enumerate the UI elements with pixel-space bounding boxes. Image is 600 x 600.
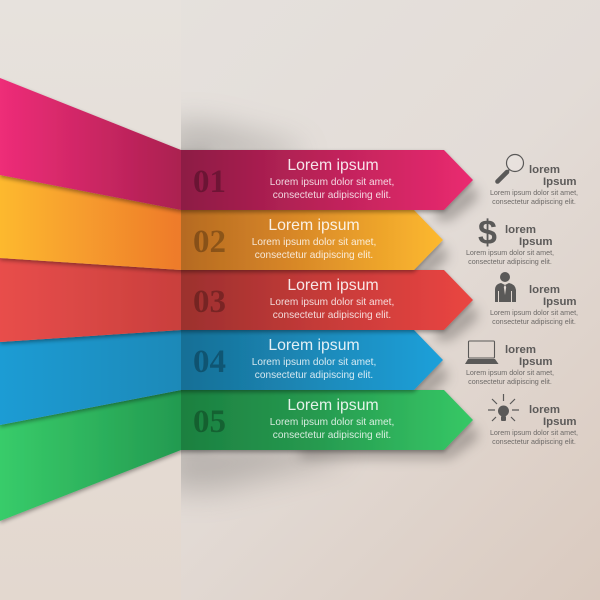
- side text 4: Lorem ipsum dolor sit amet,: [466, 369, 554, 377]
- band 1: pink: [0, 78, 473, 210]
- number 04: 04: [193, 344, 226, 380]
- band 4: blue: [0, 330, 443, 425]
- side text 4: consectetur adipiscing elit.: [468, 378, 552, 386]
- icon: dollar: $: [478, 214, 497, 252]
- arrow text 2: consectetur adipiscing elit.: [255, 250, 373, 261]
- band 2: orange: [0, 175, 443, 270]
- arrow text 4: Lorem ipsum: [268, 337, 360, 354]
- arrow: pink: [181, 150, 473, 210]
- number 02: 02: [193, 224, 226, 260]
- side text 3: Ipsum: [543, 296, 577, 308]
- icon: magnifier: [498, 154, 524, 182]
- left panel: blue: [0, 330, 181, 425]
- arrow text 2: [252, 217, 376, 261]
- left wall: [0, 0, 181, 600]
- arrow text 4: Lorem ipsum dolor sit amet,: [252, 357, 376, 368]
- side text 2: lorem: [505, 224, 536, 236]
- side text 3: lorem: [529, 284, 560, 296]
- arrow text 2: Lorem ipsum: [268, 217, 360, 234]
- side text 1: consectetur adipiscing elit.: [492, 198, 576, 206]
- icon: light bulb: [488, 394, 519, 421]
- arrow text 3: consectetur adipiscing elit.: [273, 310, 391, 321]
- left panel: red: [0, 258, 181, 342]
- band 5: green: [0, 390, 473, 521]
- side text 2: Ipsum: [519, 236, 553, 248]
- arrow: orange: [181, 210, 443, 270]
- arrow text 1: [270, 157, 394, 201]
- side text 5: lorem: [529, 404, 560, 416]
- side text 1: [490, 164, 578, 206]
- arrow text 1: Lorem ipsum dolor sit amet,: [270, 177, 394, 188]
- left panel: pink: [0, 78, 181, 210]
- side text 2: [466, 224, 554, 266]
- icon: businessman: [495, 272, 516, 302]
- side text 1: Lorem ipsum dolor sit amet,: [490, 189, 578, 197]
- arrow: green: [181, 390, 473, 450]
- side text 4: [466, 344, 554, 386]
- wall shadow: [165, 125, 340, 490]
- arrow: red: [181, 270, 473, 330]
- number 01: 01: [193, 164, 226, 200]
- arrow text 1: Lorem ipsum: [287, 157, 379, 174]
- side text 2: Lorem ipsum dolor sit amet,: [466, 249, 554, 257]
- arrow text 4: [252, 337, 376, 381]
- arrow text 4: consectetur adipiscing elit.: [255, 370, 373, 381]
- left panel: green: [0, 390, 181, 521]
- side text 1: Ipsum: [543, 176, 577, 188]
- side text 5: consectetur adipiscing elit.: [492, 438, 576, 446]
- band 3: red: [0, 258, 473, 342]
- left panel: orange: [0, 175, 181, 270]
- arrow text 2: Lorem ipsum dolor sit amet,: [252, 237, 376, 248]
- side text 4: Ipsum: [519, 356, 553, 368]
- arrow text 5: Lorem ipsum dolor sit amet,: [270, 417, 394, 428]
- arrow text 1: consectetur adipiscing elit.: [273, 190, 391, 201]
- side text 3: [490, 284, 578, 326]
- arrow text 5: consectetur adipiscing elit.: [273, 430, 391, 441]
- arrow text 5: [270, 397, 394, 441]
- arrow text 3: Lorem ipsum: [287, 277, 379, 294]
- side text 5: Lorem ipsum dolor sit amet,: [490, 429, 578, 437]
- arrow: blue: [181, 330, 443, 390]
- side text 2: consectetur adipiscing elit.: [468, 258, 552, 266]
- number 03: 03: [193, 284, 226, 320]
- side text 1: lorem: [529, 164, 560, 176]
- arrow shadows: [300, 184, 478, 458]
- side text 5: Ipsum: [543, 416, 577, 428]
- side text 5: [490, 404, 578, 446]
- side text 3: consectetur adipiscing elit.: [492, 318, 576, 326]
- side text 3: Lorem ipsum dolor sit amet,: [490, 309, 578, 317]
- arrow text 3: [270, 277, 394, 321]
- numbers: [193, 164, 226, 440]
- icon: laptop: [465, 341, 498, 364]
- side text 4: lorem: [505, 344, 536, 356]
- arrow text 5: Lorem ipsum: [287, 397, 379, 414]
- number 05: 05: [193, 404, 226, 440]
- arrow text 3: Lorem ipsum dolor sit amet,: [270, 297, 394, 308]
